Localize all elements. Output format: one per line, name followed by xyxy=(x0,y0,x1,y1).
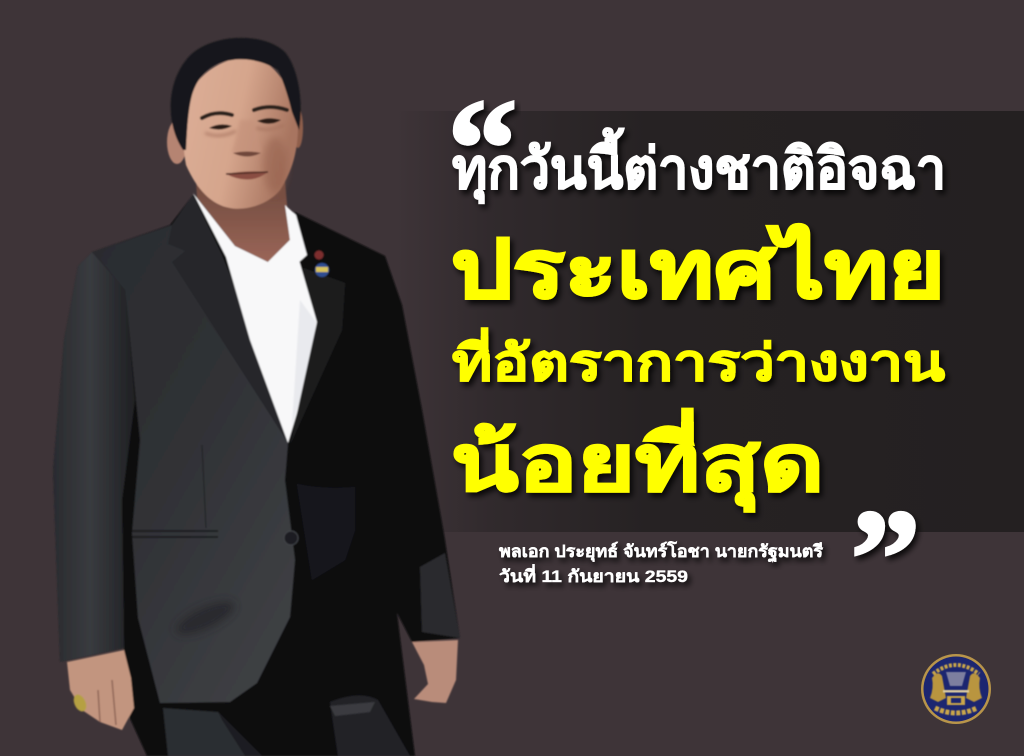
quote line 1: ทุกวันนี้ต่างชาติอิจฉา xyxy=(452,128,946,204)
cheek shading xyxy=(263,137,287,193)
speaker attribution: พลเอก ประยุทธ์ จันทร์โอชา นายกรัฐมนตรี xyxy=(499,541,824,563)
closing quotation mark: ” xyxy=(850,482,920,636)
white shirt xyxy=(193,193,317,443)
button xyxy=(284,531,298,545)
right hand xyxy=(412,640,458,703)
opening quotation mark: “ xyxy=(448,71,518,226)
lapel left xyxy=(168,195,288,443)
eye shadows xyxy=(205,125,284,136)
mouth xyxy=(226,171,268,180)
dart seam xyxy=(202,445,206,528)
quote line 4: น้อยที่สุด xyxy=(451,408,824,512)
left sleeve xyxy=(53,252,135,662)
left ear xyxy=(167,120,187,164)
portrait: man in dark suit xyxy=(53,38,460,756)
trouser highlights xyxy=(163,708,262,756)
dark quote band xyxy=(395,111,1024,532)
brows xyxy=(202,107,287,118)
left hand xyxy=(67,650,134,730)
fold shading xyxy=(171,595,239,641)
quote line 2: ประเทศไทย xyxy=(451,223,945,314)
icon: government emblem xyxy=(921,654,991,724)
eyes xyxy=(209,118,281,130)
right forearm xyxy=(420,553,460,638)
right jacket dark side xyxy=(285,212,445,630)
quote line 3: ที่อัตราการว่างงาน xyxy=(452,328,945,391)
right ear xyxy=(293,108,303,148)
jacket front panel xyxy=(92,195,295,703)
neck xyxy=(196,180,290,262)
inner pocket shade xyxy=(297,484,355,580)
ring xyxy=(71,693,89,713)
right collar xyxy=(268,205,307,268)
nose xyxy=(232,120,262,156)
hair xyxy=(171,38,301,150)
date: วันที่ 11 กันยายน 2559 xyxy=(499,564,688,586)
right lapel xyxy=(290,268,345,445)
pocket xyxy=(132,531,218,537)
face xyxy=(184,58,298,209)
black silhouette of suit and trousers xyxy=(53,195,460,756)
pins xyxy=(314,250,324,260)
